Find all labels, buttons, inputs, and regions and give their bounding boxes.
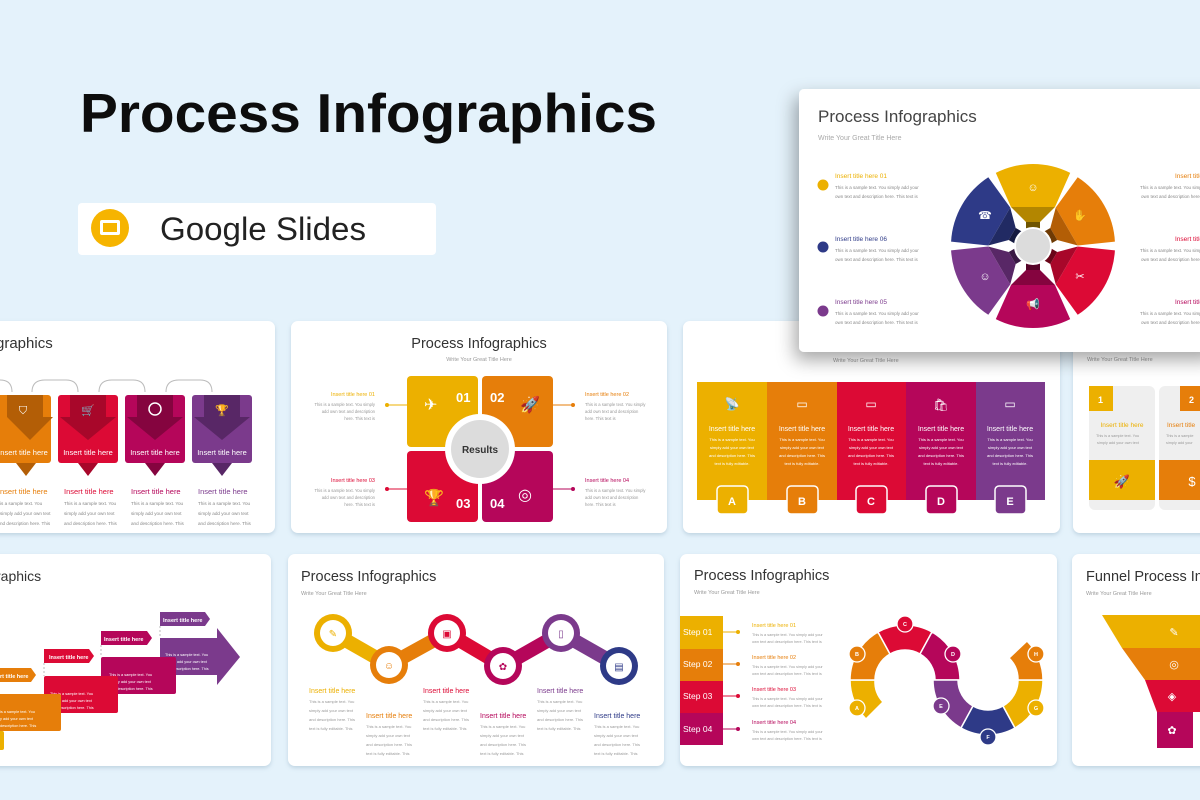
badge: Google Slides — [78, 203, 436, 255]
panel: card C columns A-E — [683, 321, 1060, 533]
panel: card C columns A-E: C — [867, 496, 875, 508]
panel: card G steps and S-curve: G — [1034, 706, 1038, 712]
panel: card F zigzag circles: Write Your Great Title Here — [301, 591, 367, 597]
panel: card G steps and S-curve: Insert title here 04 — [752, 720, 796, 726]
panel: card B results quadrant: Write Your Great Title Here — [446, 357, 512, 363]
panel: card B results quadrant: 03 — [456, 496, 470, 511]
panel: card B results quadrant: here. This text is — [344, 502, 375, 507]
panel: card F zigzag circles: Insert title here — [423, 688, 469, 695]
legend right: own text and description here — [1141, 320, 1200, 325]
box red: 🛒 — [81, 404, 95, 417]
panel: card F zigzag circles: simply add your own text — [537, 708, 582, 713]
panel: card F zigzag circles: This is a sample text. You — [480, 724, 525, 729]
panel: card F zigzag circles: ▤ — [614, 662, 624, 673]
step magenta: and description here. This — [109, 687, 153, 691]
panel: card G steps and S-curve: own text and description here. This text is — [752, 737, 822, 741]
panel: card F zigzag circles: Insert title here — [480, 713, 526, 720]
arrow purple: This is a sample text. You — [165, 653, 208, 657]
panel: card F zigzag circles: simply add your own text — [594, 733, 639, 738]
panel: card F zigzag circles: Insert title here — [366, 713, 412, 720]
panel: card F zigzag circles: simply add your own text — [423, 708, 468, 713]
step red: simply add your own text — [50, 699, 93, 703]
panel: card F zigzag circles: text is fully editable. This — [423, 726, 467, 731]
panel: card F zigzag circles: ▣ — [442, 629, 452, 640]
panel: card H funnel — [1072, 554, 1200, 766]
panel: card D numbered columns: This is a sample text. You — [1096, 434, 1139, 438]
panel: card C columns A-E: This is a sample text. You — [918, 437, 964, 442]
panel: card E staircase arrows — [0, 554, 271, 766]
panel: card G steps and S-curve: own text and description here. This text is — [752, 672, 822, 676]
panel: card G steps and S-curve: Write Your Great Title Here — [694, 590, 760, 596]
panel: card D numbered columns: This is a sample — [1166, 434, 1193, 438]
badge: Google Slides: Google Slides — [160, 211, 366, 247]
step magenta: simply add your own text — [109, 680, 152, 684]
S-curve segments — [850, 625, 1043, 735]
panel: card B results quadrant: Insert title here 01 — [331, 392, 375, 398]
panel: card B results quadrant: This is a sample text. You simply — [314, 402, 376, 407]
panel: card C columns A-E: Write Your Great Title Here — [833, 358, 899, 364]
panel: card F zigzag circles: Insert title here — [537, 688, 583, 695]
panel: card B results quadrant: here. This text is — [585, 416, 616, 421]
wheel chart: ☎ — [978, 210, 992, 222]
legend left: This is a sample text. You simply add your — [835, 185, 919, 190]
panel: card F zigzag circles: Insert title here — [309, 688, 355, 695]
wheel chart: 📢 — [1026, 298, 1040, 311]
panel: card F zigzag circles: This is a sample text. You — [537, 699, 582, 704]
legend left: Insert title here 05 — [835, 299, 887, 306]
panel: card F zigzag circles: and description here. This — [537, 717, 583, 722]
panel: card F zigzag circles: text is fully editable. This — [537, 726, 581, 731]
panel: card D numbered columns — [1073, 321, 1200, 533]
panel: card F zigzag circles — [288, 554, 664, 766]
panel: card C columns A-E: Insert title here — [918, 426, 964, 433]
step orange: is a sample text. You — [0, 710, 35, 714]
panel: card C columns A-E: text is fully editable. — [715, 461, 749, 466]
icon: slides logo — [91, 209, 129, 247]
legend right — [1140, 173, 1200, 325]
panel: card C columns A-E: 🛍 — [933, 398, 949, 412]
panel: card A arrows down boxes: This is a sample text. You — [198, 501, 251, 506]
box red: Insert title here — [63, 448, 113, 457]
panel: card B results quadrant: This is a sample text. You simply — [585, 402, 646, 407]
panel: card G steps and S-curve: Process Infographics — [694, 568, 829, 584]
panel: card D numbered columns: 2 — [1189, 395, 1194, 405]
panel: card F zigzag circles: This is a sample text. You — [423, 699, 468, 704]
step red — [44, 649, 118, 713]
panel: card B results quadrant: add own text and description — [322, 409, 376, 414]
wheel chart — [943, 164, 1123, 328]
panel: card F zigzag circles: text is fully editable. This — [480, 751, 524, 756]
legend left: Insert title here 01 — [835, 173, 887, 180]
panel: card H funnel: Funnel Process In — [1086, 569, 1200, 585]
panel: card C columns A-E: ▭ — [865, 397, 877, 411]
panel: card F zigzag circles: and description here. This — [423, 717, 469, 722]
panel: card D numbered columns: 🚀 — [1114, 474, 1130, 489]
panel: card C columns A-E: text is fully editable. — [785, 461, 819, 466]
step orange: rt title here — [0, 674, 28, 680]
step orange: y add your own text — [0, 717, 34, 721]
results circle — [445, 414, 515, 484]
panel: card G steps and S-curve: Step 04 — [683, 724, 713, 734]
panel: card C columns A-E: ▭ — [1004, 397, 1016, 411]
panel: card A arrows down boxes: and description here. This — [131, 521, 184, 526]
panel: card B results quadrant: 🚀 — [520, 395, 540, 414]
panel: card B results quadrant: 02 — [490, 390, 504, 405]
wheel chart: ✋ — [1073, 209, 1087, 222]
panel: card B results quadrant: Insert title here 03 — [331, 478, 375, 484]
box purple: Insert title here — [197, 448, 247, 457]
legend left — [818, 173, 919, 325]
panel: card C columns A-E: ▭ — [796, 397, 808, 411]
panel: card G steps and S-curve: Insert title here 02 — [752, 655, 796, 661]
panel: card C columns A-E: Insert title here — [987, 426, 1033, 433]
legend right: own text and description here — [1141, 257, 1200, 262]
panel: card B results quadrant: 04 — [490, 496, 505, 511]
box magenta — [125, 395, 185, 476]
panel: card F zigzag circles: This is a sample text. You — [309, 699, 354, 704]
panel: card F zigzag circles: and description here. This — [594, 742, 640, 747]
panel: card G steps and S-curve: Step 03 — [683, 691, 713, 701]
panel: card B results quadrant: ✈ — [424, 397, 437, 414]
panel: card C columns A-E: simply add your own text — [780, 445, 825, 450]
panel: featured wheel slide: Write Your Great Title Here — [818, 135, 902, 142]
panel: card G steps and S-curve: C — [903, 622, 907, 628]
panel: card C columns A-E: simply add your own text — [988, 445, 1033, 450]
panel: card B results quadrant: here. This text is — [585, 502, 616, 507]
panel: card G steps and S-curve: Step 02 — [683, 659, 713, 669]
arrow purple: simply add your own text — [165, 660, 208, 664]
panel: card C columns A-E: D — [937, 496, 945, 508]
panel: card F zigzag circles: and description here. This — [480, 742, 526, 747]
panel: card F zigzag circles: Insert title here — [594, 713, 640, 720]
panel: card F zigzag circles: text is fully editable. This — [594, 751, 638, 756]
panel: card C columns A-E: simply add your own text — [849, 445, 894, 450]
panel: card C columns A-E: text is fully editable. — [993, 461, 1027, 466]
panel: card A arrows down boxes: simply add your own text — [198, 511, 249, 516]
panel: card B results quadrant: add own text and description — [585, 495, 639, 500]
legend left: This is a sample text. You simply add your — [835, 248, 919, 253]
panel: card F zigzag circles: and description here. This — [366, 742, 412, 747]
panel: card D numbered columns: simply add your — [1166, 441, 1193, 445]
panel: card G steps and S-curve: Step 01 — [683, 627, 713, 637]
panel: card F zigzag circles: ✎ — [329, 629, 337, 640]
wheel chart: ☺ — [979, 271, 991, 283]
panel: card D numbered columns: $ — [1188, 474, 1196, 489]
panel: card F zigzag circles: Process Infographics — [301, 569, 436, 585]
panel: featured wheel slide — [799, 89, 1200, 352]
panel: card B results quadrant: Insert title here 02 — [585, 392, 629, 398]
step red: Insert title here — [49, 655, 88, 661]
panel: card B results quadrant: ◎ — [518, 487, 532, 504]
panel: card A arrows down boxes: simply add your own text — [64, 511, 115, 516]
legend left: own text and description here. This text is — [835, 194, 918, 199]
panel: card B results quadrant: Process Infographics — [411, 336, 547, 352]
panel: card G steps and S-curve: This is a sample text. You simply add your — [752, 665, 823, 669]
step magenta: This is a sample text. You — [109, 673, 152, 677]
panel: card B results quadrant — [291, 321, 667, 533]
panel: card G steps and S-curve: D — [951, 652, 955, 658]
panel: card C columns A-E: This is a sample text. You — [987, 437, 1033, 442]
arrow purple: Insert title here — [163, 618, 202, 624]
panel: card G steps and S-curve — [680, 554, 1057, 766]
panel: card F zigzag circles: ▯ — [558, 629, 564, 640]
panel: card C columns A-E: Insert title here — [779, 426, 825, 433]
panel: card F zigzag circles: simply add your own text — [480, 733, 525, 738]
legend left: own text and description here. This text is — [835, 320, 918, 325]
box purple — [192, 395, 252, 476]
panel: card F zigzag circles: ✿ — [499, 662, 507, 673]
arrow purple: and description here. This — [165, 667, 209, 671]
box magenta: Insert title here — [130, 448, 180, 457]
panel: card C columns A-E: text is fully editable. — [924, 461, 958, 466]
step magenta — [101, 631, 176, 694]
panel: card B results quadrant: add own text and description — [585, 409, 639, 414]
arrow purple — [160, 612, 240, 685]
panel: card A arrows down boxes: is a sample text. You — [0, 501, 43, 506]
panel: card C columns A-E: Insert title here — [709, 426, 755, 433]
box purple: 🏆 — [215, 404, 229, 417]
results circle: Results — [462, 445, 498, 456]
box orange: ⛉ — [19, 405, 28, 417]
panel: card B results quadrant: 🏆 — [424, 488, 444, 507]
panel: card F zigzag circles: text is fully editable. This — [366, 751, 410, 756]
panel: card F zigzag circles: simply add your own text — [366, 733, 411, 738]
panel: card G steps and S-curve: own text and description here. This text is — [752, 704, 822, 708]
panel: card C columns A-E: and description here. This — [848, 453, 894, 458]
panel: card A arrows down boxes: nd description here. This — [0, 521, 51, 526]
panel: card F zigzag circles: simply add your own text — [309, 708, 354, 713]
box red — [58, 395, 118, 476]
panel: card A arrows down boxes: This is a sample text. You — [64, 501, 117, 506]
step orange: description here. This — [0, 724, 36, 728]
panel: card C columns A-E: and description here. This — [987, 453, 1033, 458]
panel: card D numbered columns: Insert title here — [1100, 422, 1144, 429]
panel: card B results quadrant: 01 — [456, 390, 470, 405]
panel: card F zigzag circles: and description here. This — [309, 717, 355, 722]
panel: card A arrows down boxes: Insert title here — [64, 487, 114, 496]
panel: card B results quadrant: here. This text is — [344, 416, 375, 421]
panel: card C columns A-E: E — [1006, 496, 1014, 508]
step red: This is a sample text. You — [50, 692, 93, 696]
panel: card G steps and S-curve: This is a sample text. You simply add your — [752, 730, 823, 734]
panel: card F zigzag circles: text is fully editable. This — [309, 726, 353, 731]
panel: card F zigzag circles: ☺ — [384, 661, 394, 672]
panel: card C columns A-E: A — [728, 496, 736, 508]
panel: card A arrows down boxes: simply add your own text — [131, 511, 182, 516]
panel: card C columns A-E: Insert title here — [848, 426, 894, 433]
panel: card A arrows down boxes: Insert title here — [198, 487, 248, 496]
step magenta: Insert title here — [104, 637, 143, 643]
panel: card G steps and S-curve: Insert title here 03 — [752, 687, 796, 693]
panel: card H funnel: ✎ — [1169, 627, 1179, 639]
step orange — [0, 668, 61, 731]
box orange — [0, 395, 53, 476]
panel: card G steps and S-curve: This is a sample text. You simply add your — [752, 633, 823, 637]
panel: card C columns A-E: and description here. This — [709, 453, 755, 458]
panel: card A arrows down boxes: simply add your own text — [0, 511, 51, 516]
panel: card C columns A-E: simply add your own text — [710, 445, 755, 450]
panel: card B results quadrant: add own text and description — [322, 495, 376, 500]
panel: card B results quadrant: This is a sample text. You simply — [585, 488, 646, 493]
legend left: own text and description here. This text is — [835, 257, 918, 262]
panel: card G steps and S-curve: B — [855, 652, 859, 658]
panel: card F zigzag circles: This is a sample text. You — [594, 724, 639, 729]
panel: card A arrows down boxes: This is a sample text. You — [131, 501, 184, 506]
wheel chart: ☺ — [1027, 182, 1039, 194]
panel: card C columns A-E: text is fully editable. — [854, 461, 888, 466]
panel: card B results quadrant: Insert title here 04 — [585, 478, 629, 484]
panel: card G steps and S-curve: E — [939, 704, 943, 710]
panel: card C columns A-E: simply add your own text — [919, 445, 964, 450]
panel: featured wheel slide: Process Infographics — [818, 107, 977, 126]
panel: card H funnel: ◎ — [1169, 659, 1179, 671]
panel: card D numbered columns: simply add your own text — [1097, 441, 1140, 445]
panel: card D numbered columns: 1 — [1098, 395, 1103, 405]
wheel chart: ✂ — [1075, 271, 1085, 283]
panel: card H funnel: Write Your Great Title Here — [1086, 591, 1152, 597]
step red: and description here. This — [50, 706, 94, 710]
legend left: Insert title here 06 — [835, 236, 887, 243]
legend left: This is a sample text. You simply add your — [835, 311, 919, 316]
panel: card C columns A-E: 📡 — [725, 396, 740, 411]
panel: card A arrows down boxes: and description here. This — [64, 521, 117, 526]
panel: card G steps and S-curve: Insert title here 01 — [752, 623, 796, 629]
panel: card G steps and S-curve: A — [855, 706, 859, 712]
panel: card H funnel: ◈ — [1168, 691, 1177, 703]
panel: card A arrows down boxes — [0, 321, 275, 533]
panel: card C columns A-E: B — [798, 496, 806, 508]
panel: card A arrows down boxes: and description here. This — [198, 521, 251, 526]
panel: card D numbered columns: Write Your Great Title Here — [1087, 357, 1153, 363]
panel: card G steps and S-curve: F — [986, 735, 990, 741]
panel: card A arrows down boxes: nsert title here — [0, 487, 48, 496]
panel: card A arrows down boxes: Insert title here — [131, 487, 181, 496]
title: Process Infographics — [80, 82, 657, 144]
legend right: own text and description here — [1141, 194, 1200, 199]
panel: card C columns A-E: This is a sample text. You — [709, 437, 755, 442]
panel: card C columns A-E: and description here. This — [779, 453, 825, 458]
panel: card F zigzag circles: This is a sample text. You — [366, 724, 411, 729]
panel: card G steps and S-curve: This is a sample text. You simply add your — [752, 697, 823, 701]
panel: card B results quadrant: This is a sample text. You simply — [314, 488, 376, 493]
panel: card C columns A-E: and description here. This — [918, 453, 964, 458]
panel: card G steps and S-curve: own text and description here. This text is — [752, 640, 822, 644]
panel: card C columns A-E: This is a sample text. You — [779, 437, 825, 442]
panel: card G steps and S-curve: H — [1034, 652, 1038, 658]
panel: card C columns A-E: This is a sample text. You — [848, 437, 894, 442]
panel: card D numbered columns: Insert title — [1167, 422, 1196, 429]
panel: card H funnel: ✿ — [1167, 725, 1177, 737]
